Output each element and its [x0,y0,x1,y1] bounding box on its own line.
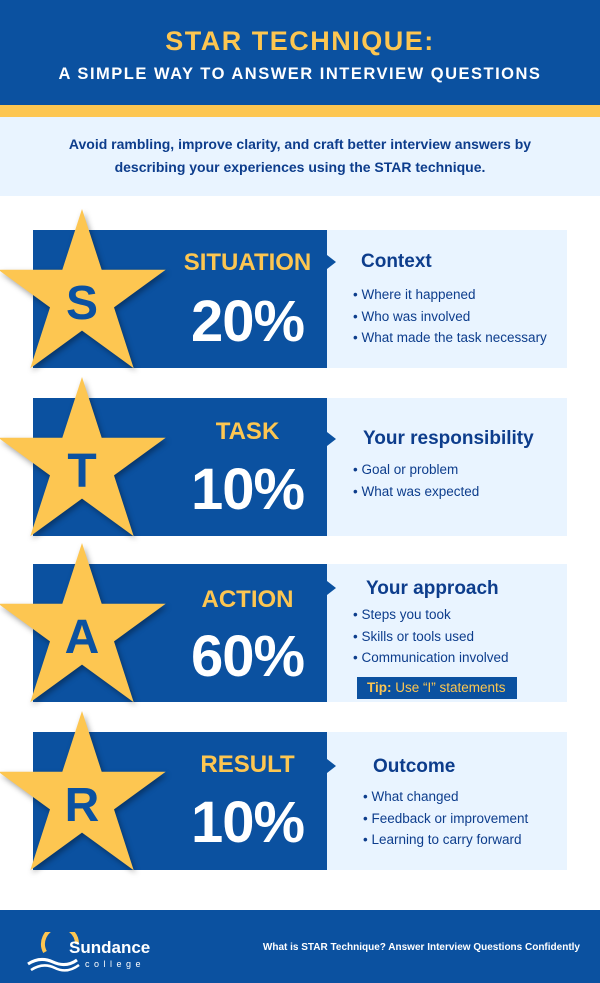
icon: star R [0,711,167,874]
heading: Outcome [373,756,455,777]
panel: task [0,377,567,540]
subtitle: A SIMPLE WAY TO ANSWER INTERVIEW QUESTIONS [59,65,541,83]
icon: star T [0,377,167,540]
icon: star A [0,543,167,706]
percentage: 10% [191,790,304,855]
percentage: 60% [191,624,304,689]
icon: star S [0,209,167,372]
intro text [0,117,600,196]
bullets: • Feedback or improvement [363,810,528,826]
icon: star A: A [65,611,99,664]
label: SITUATION [184,249,311,276]
footer text: What is STAR Technique? Answer Interview Questions Confidently [263,942,580,953]
callout: tip: Tip: Use “I” statements [367,680,506,695]
panel: situation [0,209,567,372]
heading: Context [361,251,432,272]
heading: Your approach [366,578,499,599]
label: RESULT [200,751,295,778]
label: TASK [216,418,279,445]
panel: action [0,543,567,706]
bullets: • What was expected [353,484,479,498]
bullets: • Learning to carry forward [363,832,522,847]
icon: star R: R [65,779,99,832]
title: STAR TECHNIQUE: [165,26,435,56]
footer [0,910,600,983]
bullets [363,789,528,847]
bullets [353,287,547,345]
icon: star S: S [66,277,98,330]
percentage: 20% [191,289,304,354]
bullets: • Skills or tools used [353,628,474,644]
callout: tip [357,677,517,699]
heading: Your responsibility [363,428,534,449]
bullets: • Steps you took [353,607,451,622]
intro text: Avoid rambling, improve clarity, and craft better interview answers by [69,136,531,152]
bullets: • What changed [363,789,459,804]
intro text: describing your experiences using the STAR technique. [115,159,485,175]
bullets: • Communication involved [353,650,509,665]
header [0,0,600,105]
bullets: • Who was involved [353,308,470,324]
bullets: • Where it happened [353,287,476,302]
logo: Sundance [69,938,150,957]
bullets [353,462,479,499]
logo [27,932,150,972]
bullets: • What made the task necessary [353,330,547,345]
bullets [353,607,509,665]
label: ACTION [202,586,294,613]
percentage: 10% [191,457,304,522]
bullets: • Goal or problem [353,462,458,477]
icon: star T: T [67,445,97,498]
panel: result [0,711,567,874]
logo: college [85,959,145,969]
